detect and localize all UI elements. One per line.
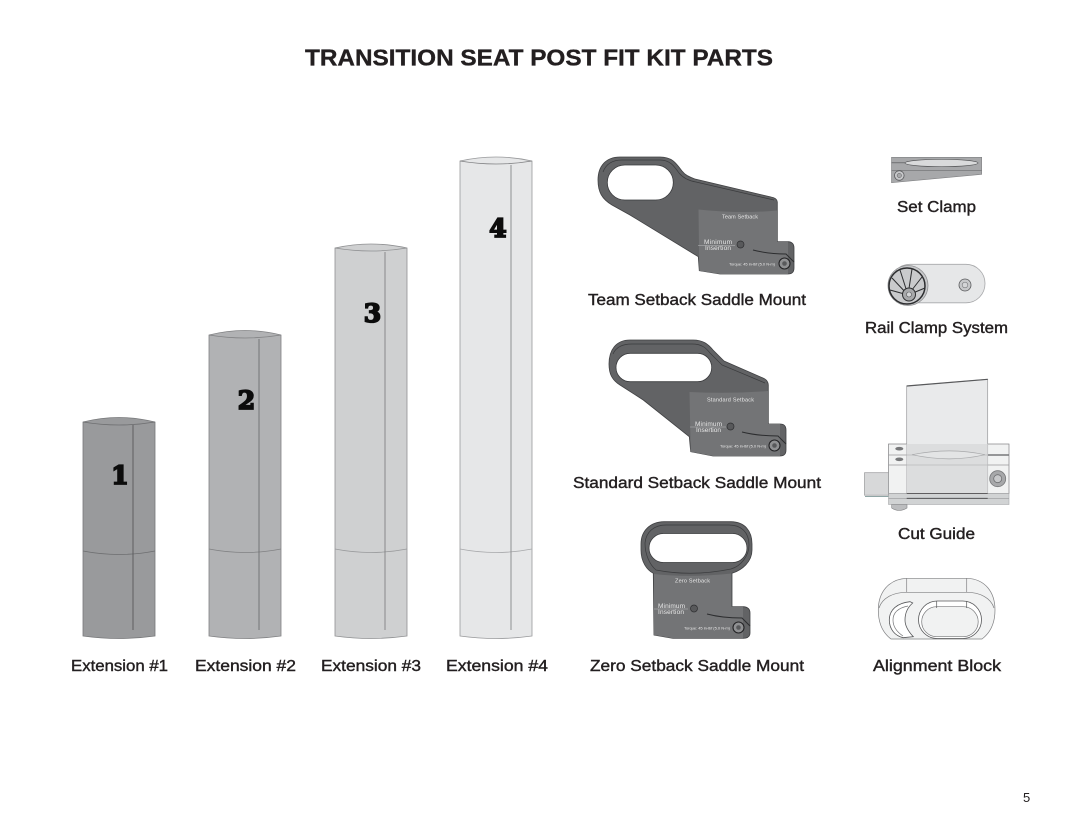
oval slot bbox=[918, 601, 982, 638]
label: zero setback: Zero Setback Saddle Mount bbox=[590, 658, 805, 675]
standard setback saddle mount: Minimum bbox=[695, 421, 722, 428]
bolt bbox=[769, 440, 780, 451]
standard setback saddle mount bbox=[609, 340, 786, 456]
standard setback saddle mount: Insertion bbox=[696, 427, 721, 434]
extension labels: Extension #2 bbox=[195, 658, 296, 675]
number 2: 2 bbox=[238, 386, 255, 415]
tab bbox=[864, 473, 888, 495]
number 3: 3 bbox=[364, 299, 381, 328]
zero setback saddle mount: Insertion bbox=[658, 609, 684, 616]
rail clamp system bbox=[888, 264, 985, 306]
extension 3 tube bbox=[335, 244, 407, 638]
alignment block bbox=[878, 578, 995, 639]
title: TRANSITION SEAT POST FIT KIT PARTS bbox=[305, 44, 773, 70]
cut guide bbox=[864, 379, 1009, 510]
set clamp bbox=[892, 157, 982, 183]
engraved text: Standard Setback bbox=[707, 398, 754, 404]
label: rail clamp: Rail Clamp System bbox=[865, 320, 1008, 337]
bolt bbox=[894, 171, 904, 180]
extension labels bbox=[71, 658, 548, 675]
label: standard setback: Standard Setback Saddle Mount bbox=[573, 475, 822, 492]
slots bbox=[895, 447, 903, 451]
label: set clamp: Set Clamp bbox=[897, 199, 976, 216]
standard setback saddle mount: Torque: 45 in-lbf (5.0 N-m) bbox=[720, 444, 767, 448]
wheel bbox=[888, 266, 928, 306]
crescent slot bbox=[889, 602, 913, 638]
extension 1 tube bbox=[83, 418, 155, 638]
label: team setback: Team Setback Saddle Mount bbox=[588, 292, 807, 309]
engraved text: Team Setback bbox=[722, 214, 758, 220]
zero setback saddle mount bbox=[641, 522, 752, 638]
team setback saddle mount bbox=[598, 157, 794, 274]
zero setback saddle mount: Torque: 45 in-lbf (5.0 N-m) bbox=[684, 626, 731, 630]
extension labels: Extension #1 bbox=[71, 658, 168, 675]
rail bbox=[888, 494, 1009, 504]
bolt bbox=[779, 258, 790, 269]
extension 4 tube bbox=[460, 157, 532, 638]
extension 2 tube bbox=[209, 330, 281, 638]
extension labels: Extension #4 bbox=[446, 658, 548, 675]
bolt bbox=[733, 622, 744, 633]
bolt bbox=[990, 471, 1006, 487]
zero setback saddle mount: Minimum bbox=[658, 603, 685, 610]
team setback saddle mount: Minimum bbox=[704, 239, 732, 246]
bolt bbox=[959, 279, 971, 291]
number 1: 1 bbox=[111, 461, 129, 490]
label: cut guide: Cut Guide bbox=[898, 526, 975, 543]
team setback saddle mount: Torque: 45 in-lbf (5.0 N-m) bbox=[729, 262, 776, 266]
extension labels: Extension #3 bbox=[321, 658, 421, 675]
foot bbox=[892, 504, 907, 510]
label: alignment block: Alignment Block bbox=[873, 658, 1001, 675]
page number: 5 bbox=[1023, 790, 1030, 805]
engraved text: Zero Setback bbox=[675, 578, 710, 584]
team setback saddle mount: Insertion bbox=[705, 245, 731, 252]
number 4: 4 bbox=[489, 214, 507, 243]
